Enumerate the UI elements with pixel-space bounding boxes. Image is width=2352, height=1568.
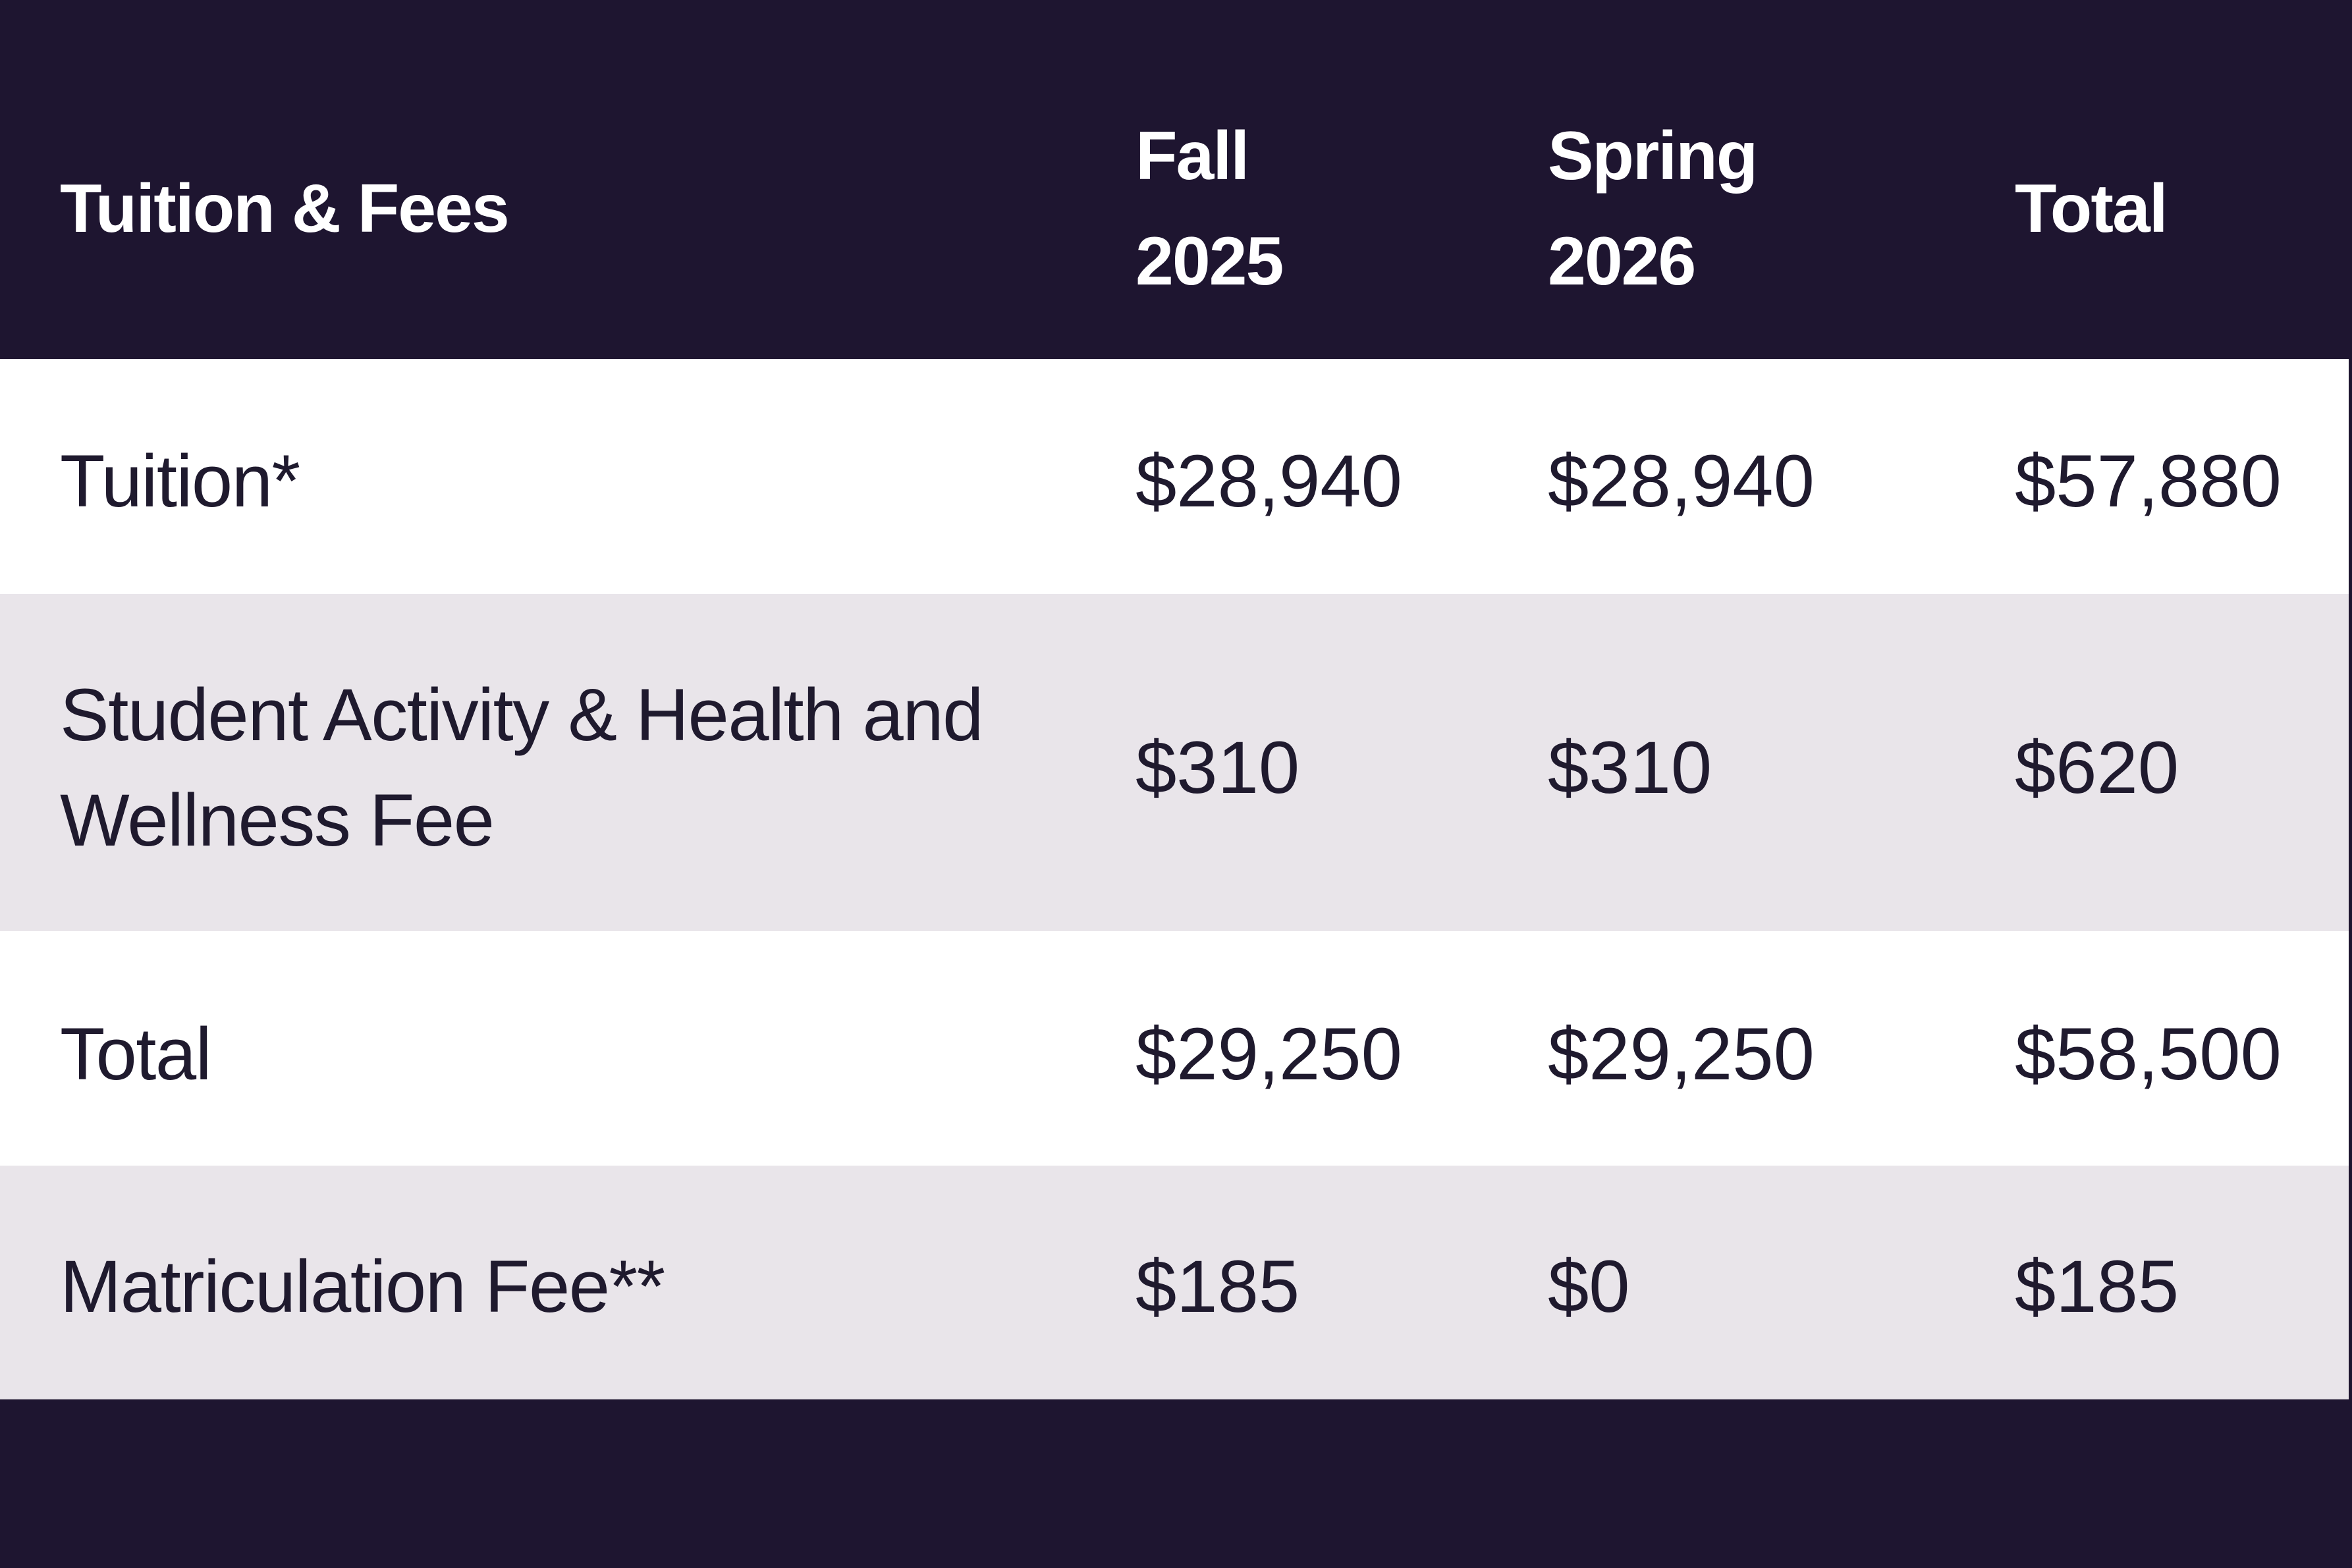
row: Total: $58,500: [2015, 1013, 2282, 1095]
header: Fall 2025: Fall: [1135, 118, 1248, 194]
header: Fall 2025: [1135, 118, 1282, 300]
table header: [60, 118, 2167, 300]
row: Total: $29,250: [1548, 1013, 1815, 1095]
header: Spring 2026: 2026: [1548, 223, 1695, 300]
row: Tuition: [0, 359, 2349, 594]
row: Student Activity fee: Student Activity & Health and: [60, 674, 983, 756]
header: Spring 2026: [1548, 118, 1757, 300]
row: Matriculation Fee: $185: [2015, 1245, 2179, 1328]
header: Spring 2026: Spring: [1548, 118, 1757, 194]
row: Tuition: $57,880: [2015, 440, 2282, 522]
row: Total: Total: [60, 1013, 211, 1095]
header: Total: Total: [2015, 171, 2167, 247]
row: Matriculation Fee: [0, 1166, 2349, 1399]
row: Total: $29,250: [1135, 1013, 1402, 1095]
row: Student Activity fee: $310: [1135, 726, 1299, 809]
row: Student Activity fee: $310: [1548, 726, 1712, 809]
row: Matriculation Fee: $185: [1135, 1245, 1299, 1328]
header: Tuition & Fees: Tuition & Fees: [60, 171, 508, 247]
row: Tuition: $28,940: [1135, 440, 1402, 522]
row: Student Activity fee: [0, 594, 2349, 931]
header: Fall 2025: 2025: [1135, 223, 1282, 300]
row: Total: [0, 931, 2349, 1166]
row: Student Activity fee: Wellness Fee: [60, 779, 493, 861]
row: Tuition: $28,940: [1548, 440, 1815, 522]
row: Matriculation Fee: Matriculation Fee**: [60, 1245, 665, 1328]
row: Matriculation Fee: $0: [1548, 1245, 1630, 1328]
row: Tuition: Tuition*: [60, 440, 300, 522]
row: Student Activity fee: $620: [2015, 726, 2179, 809]
